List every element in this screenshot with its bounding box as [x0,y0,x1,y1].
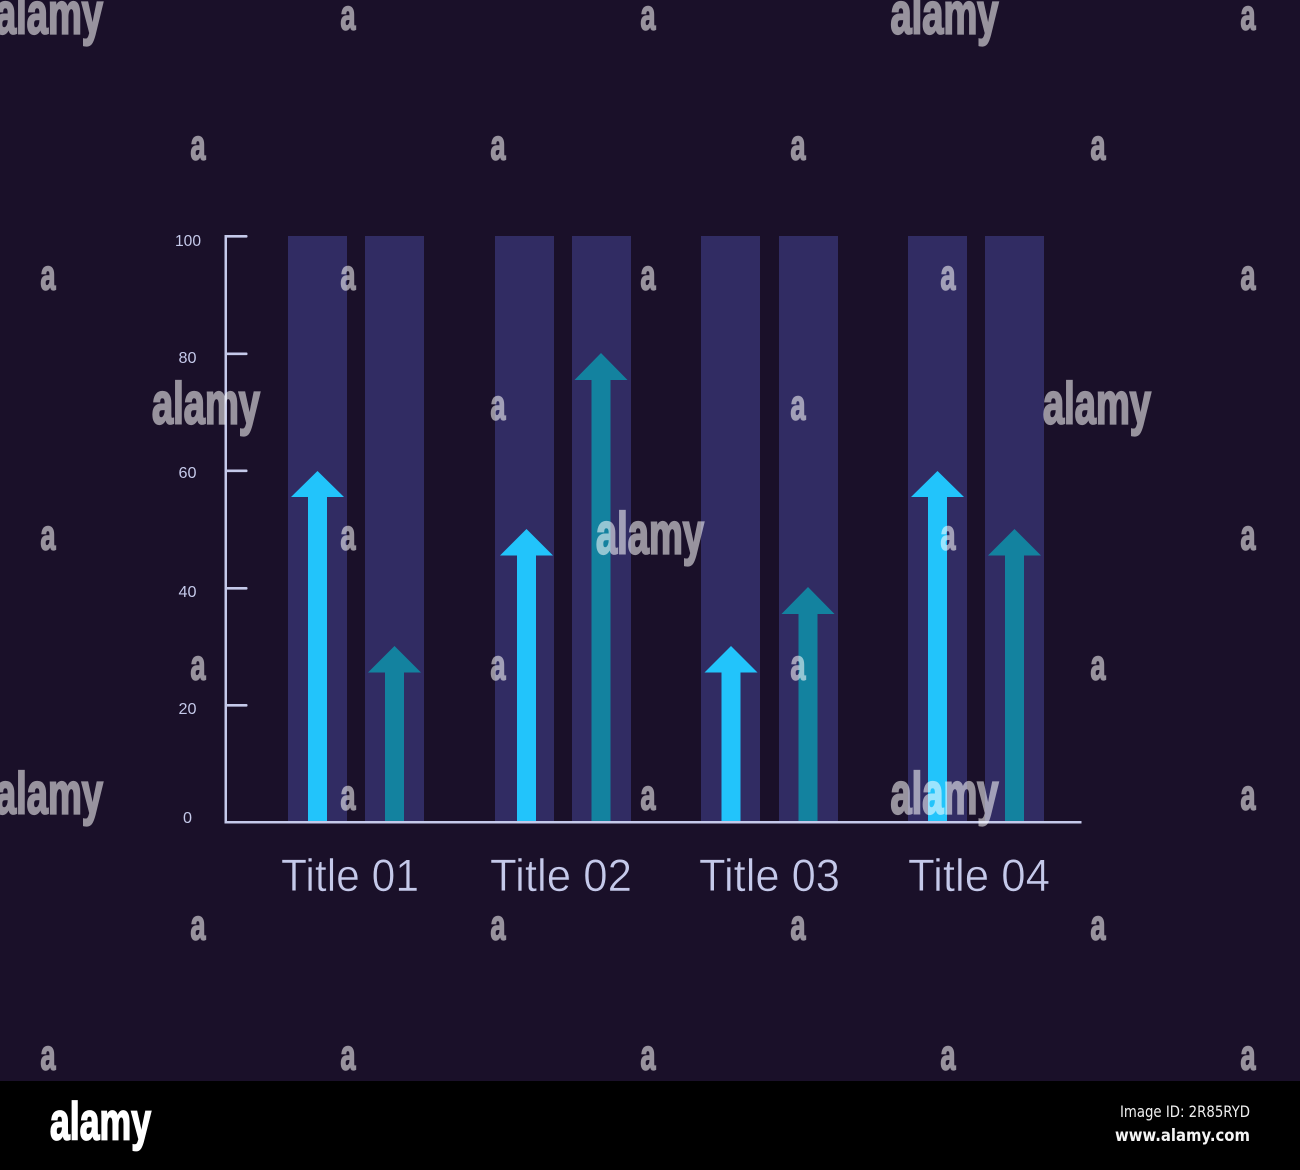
background column 04 A [908,236,967,822]
group: Title 01 bars [288,236,424,822]
watermark pattern: a [40,512,56,560]
arrow: 04 B value 50 [988,529,1041,822]
group: Title 03 bars [701,236,838,822]
y axis labels: 20 [178,701,197,718]
watermark pattern: a [640,772,656,820]
background column 01 A [288,236,347,822]
watermark pattern: a [790,122,806,170]
watermark pattern: alamy [1043,372,1151,436]
watermark pattern: a [340,772,356,820]
y axis labels: 60 [178,465,197,482]
watermark pattern: a [1090,122,1106,170]
watermark pattern: a [1090,902,1106,950]
axes [224,235,1082,824]
y axis labels: 0 [183,810,192,827]
watermark pattern: a [940,512,956,560]
watermark pattern: a [790,902,806,950]
background column 03 B [779,236,838,822]
background column 01 B [365,236,424,822]
background column 02 B [572,236,631,822]
watermark pattern: a [190,122,206,170]
x axis titles: Title 02 [490,850,632,901]
arrow: 03 A value 30 [704,646,758,822]
group: Title 04 bars [908,236,1044,822]
image id: Image ID: 2R85RYD [1120,1102,1250,1121]
watermark pattern: a [640,252,656,300]
footer bar [0,1081,1300,1170]
background column 04 B [985,236,1044,822]
watermark pattern: a [340,512,356,560]
watermark pattern: a [490,382,506,430]
watermark pattern: a [790,382,806,430]
watermark pattern: a [340,1032,356,1080]
footer background [0,1081,1300,1170]
y axis labels: 80 [178,350,197,367]
arrow: 04 A value 60 [911,471,964,822]
arrow: 02 B value 80 [574,353,628,822]
arrow: 01 A value 60 [291,471,344,822]
x axis titles [281,850,1050,901]
watermark pattern: a [790,642,806,690]
watermark pattern: a [190,902,206,950]
watermark pattern: a [40,252,56,300]
watermark pattern: a [490,902,506,950]
y axis labels [175,233,201,827]
watermark pattern: a [940,252,956,300]
watermark pattern: a [1240,512,1256,560]
footer logo: alamy [50,1092,151,1152]
y axis labels: 100 [175,233,201,250]
x axis titles: Title 04 [908,850,1050,901]
x axis titles: Title 03 [699,850,840,901]
arrow: 02 A value 50 [500,529,553,822]
watermark pattern: alamy [152,372,260,436]
watermark pattern: a [1240,1032,1256,1080]
x axis titles: Title 01 [281,850,419,901]
arrow: 01 B value 30 [368,646,421,822]
y axis labels: 40 [178,584,197,601]
watermark pattern: a [940,1032,956,1080]
watermark pattern: a [1240,772,1256,820]
watermark pattern: a [190,642,206,690]
website: www.alamy.com [1115,1126,1250,1145]
watermark pattern: a [1090,642,1106,690]
watermark pattern: a [340,252,356,300]
watermark pattern: a [40,1032,56,1080]
bar chart [288,236,1044,822]
background column 02 A [495,236,554,822]
watermark pattern: a [640,1032,656,1080]
watermark pattern: a [490,122,506,170]
arrow: 03 B value 40 [782,587,834,822]
watermark pattern: alamy [596,502,704,566]
group: Title 02 bars [495,236,631,822]
watermark pattern: alamy [890,762,998,826]
watermark pattern: a [490,642,506,690]
background column 03 A [701,236,760,822]
watermark pattern: a [1240,252,1256,300]
